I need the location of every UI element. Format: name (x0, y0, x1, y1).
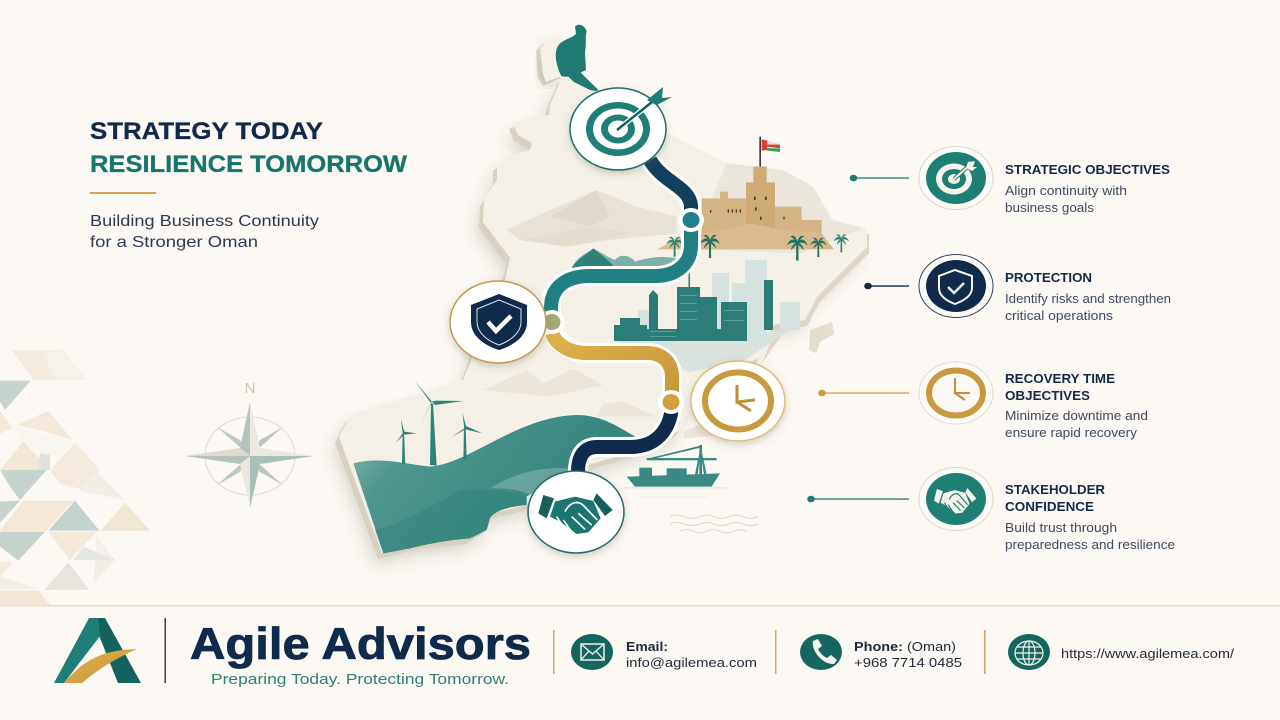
description: critical operations (1005, 309, 1113, 323)
icon: clock milestone (691, 361, 785, 441)
water ripples (670, 515, 758, 533)
logo divider (164, 618, 166, 683)
icon: shield milestone (450, 281, 546, 363)
description (1005, 521, 1175, 552)
panel: protection (864, 254, 1171, 323)
icon: target (919, 146, 993, 210)
heading block (90, 118, 407, 251)
contact: phone: Phone: (Oman) (854, 640, 956, 654)
contact: email: info@agilemea.com (626, 656, 757, 670)
contact: phone: +968 7714 0485 (854, 656, 962, 670)
wind turbines (396, 381, 482, 466)
description: Minimize downtime and (1005, 409, 1148, 423)
label: OBJECTIVES (1005, 388, 1090, 403)
sea and hills wave (353, 415, 638, 553)
subtitle: for a Stronger Oman (90, 234, 258, 251)
contact: website (1008, 634, 1235, 670)
cargo ship and crane (623, 445, 727, 497)
description: ensure rapid recovery (1005, 426, 1138, 440)
panel: strategic objectives (850, 146, 1170, 215)
icon: envelope (571, 634, 613, 670)
label (1005, 371, 1115, 403)
path segment navy (650, 160, 691, 220)
mountains (507, 190, 677, 247)
icon: clock (919, 362, 993, 424)
icon: globe (1008, 634, 1050, 670)
path segment gold (552, 333, 672, 402)
lower mountains (483, 368, 723, 438)
land mass side edge left (335, 82, 863, 559)
palms (667, 235, 849, 260)
contact: phone (800, 634, 962, 670)
subtitle: Building Business Continuity (90, 213, 319, 230)
path segment teal (551, 220, 691, 322)
description: Align continuity with (1005, 184, 1127, 198)
label: CONFIDENCE (1005, 499, 1094, 514)
description (1005, 409, 1148, 440)
land mass side edge right (762, 226, 869, 363)
land mass surface (339, 76, 867, 553)
icon: shield (919, 254, 993, 318)
footer (0, 605, 1280, 688)
path node gold (658, 390, 684, 414)
castle (657, 167, 834, 249)
description: Identify risks and strengthen (1005, 292, 1171, 306)
description: Build trust through (1005, 521, 1117, 535)
icon: target milestone (570, 87, 672, 170)
icon: handshake (919, 468, 993, 530)
oasis foliage (572, 248, 677, 268)
roadmap path (551, 160, 691, 472)
contact: website: https://www.agilemea.com/ (1061, 647, 1235, 661)
leader line (818, 390, 909, 396)
leader line (864, 283, 909, 289)
path node olive (539, 310, 565, 334)
small coastal island (809, 322, 834, 353)
description: business goals (1005, 201, 1094, 215)
icon: compass rose (185, 380, 314, 508)
northern exclave (536, 25, 598, 97)
fort scene (572, 137, 863, 268)
dividers (553, 630, 986, 674)
label: STAKEHOLDER (1005, 482, 1105, 497)
panel: stakeholder confidence (807, 468, 1175, 552)
description (1005, 184, 1127, 215)
contact: email (571, 634, 757, 670)
title line 1: STRATEGY TODAY (90, 118, 323, 145)
icon: Omani flag (759, 137, 780, 167)
subtitle (90, 213, 319, 251)
icon: compass rose: N (245, 380, 255, 397)
logo mark (54, 618, 141, 683)
contact: email: Email: (626, 640, 668, 654)
icon: handshake milestone (528, 471, 624, 553)
leader line (807, 496, 909, 502)
company name: Agile Advisors (190, 620, 531, 669)
leader line (850, 175, 909, 181)
panel: recovery time objectives (818, 362, 1148, 440)
decorative triangle pattern (0, 350, 150, 605)
description: preparedness and resilience (1005, 538, 1175, 552)
path node teal (678, 208, 704, 232)
label: STRATEGIC OBJECTIVES (1005, 162, 1170, 177)
map of Oman (335, 25, 869, 559)
label (1005, 482, 1105, 514)
description (1005, 292, 1171, 323)
city skyline (614, 260, 800, 372)
icon: phone (800, 634, 842, 670)
label: PROTECTION (1005, 270, 1092, 285)
label: RECOVERY TIME (1005, 371, 1115, 386)
gold rule (90, 192, 156, 194)
title line 2: RESILIENCE TOMORROW (90, 151, 407, 178)
path segment dark navy (578, 402, 672, 472)
tagline: Preparing Today. Protecting Tomorrow. (211, 671, 509, 688)
